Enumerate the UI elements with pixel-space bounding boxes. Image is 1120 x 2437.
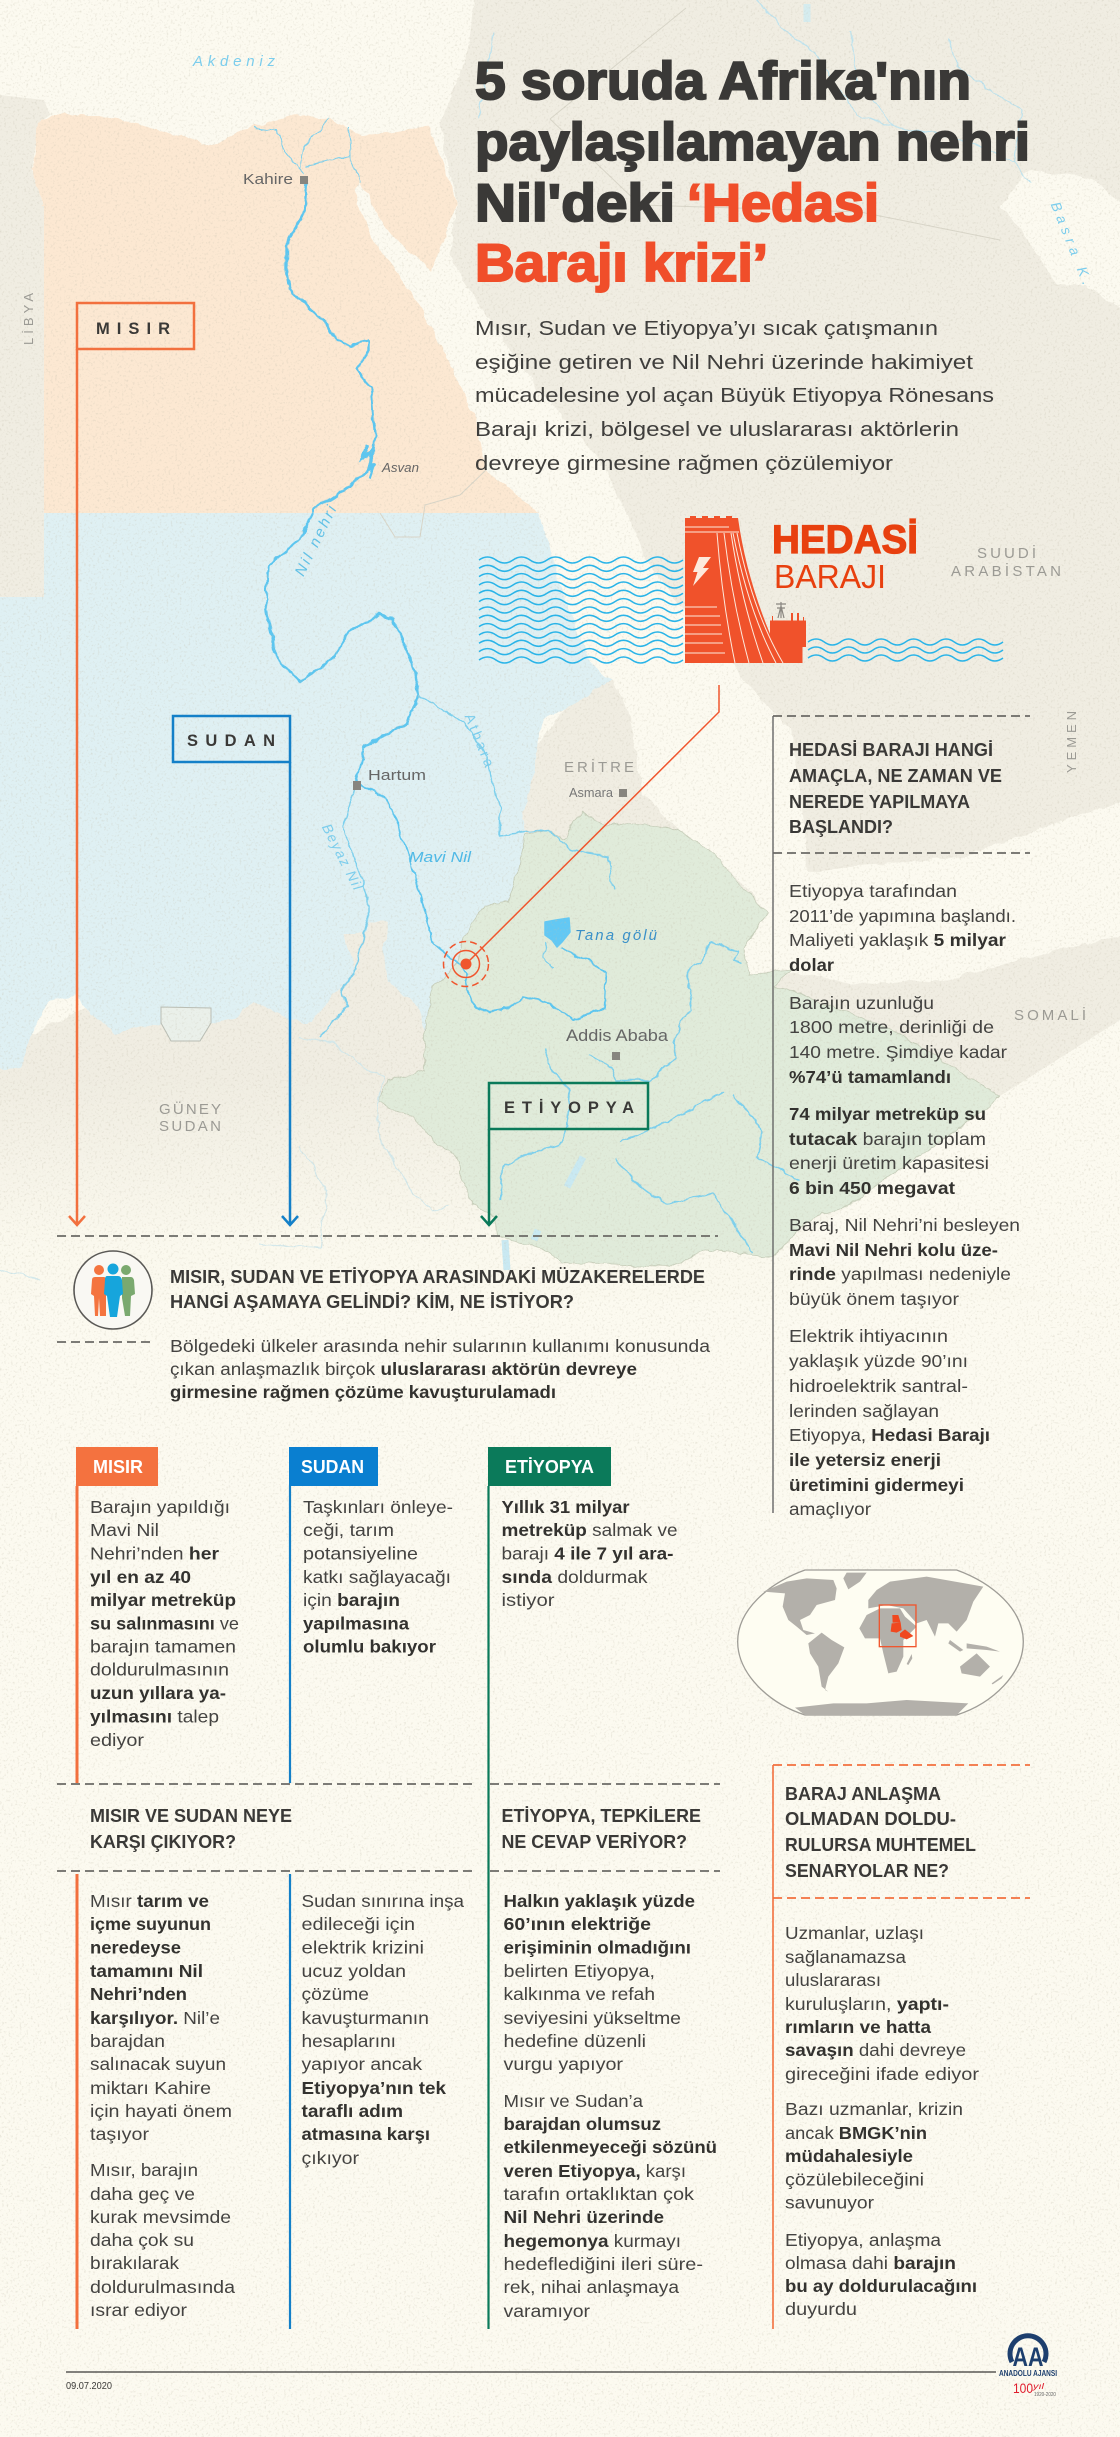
label: Guney Sudan: GÜNEY — [159, 1100, 221, 1118]
panel: Sudan position: potansiyeline — [303, 1544, 418, 1564]
text block: Etiyopya tarafından — [789, 881, 957, 901]
rivers: Middle East — [479, 0, 1029, 182]
intro text — [475, 317, 994, 475]
text block: savaşın dahi devreye — [785, 2040, 966, 2060]
text block: Misir objections: bırakılarak — [90, 2253, 179, 2273]
panel: Etiyopya position: istiyor — [502, 1590, 555, 1610]
text block: yaklaşık yüzde 90’ını — [789, 1351, 968, 1371]
power block — [770, 613, 806, 663]
icon: pylon — [776, 602, 786, 618]
logo: Anadolu Ajansi: 1920-2020 — [1034, 2392, 1056, 2398]
text block: Etiyopya response: veren Etiyopya, karşı — [504, 2161, 686, 2181]
panel: Misir position: yılmasını talep — [90, 1706, 219, 1726]
label: Mavi Nil: Mavi Nil — [409, 849, 472, 866]
text block: Sudan objections: çözüme — [302, 1984, 369, 2004]
label: Asvan: Asvan — [381, 460, 419, 475]
callout: Etiyopya — [481, 1083, 648, 1225]
text block: rımların ve hatta — [785, 2017, 931, 2037]
panel: Misir position: barajın tamamen — [90, 1636, 236, 1656]
heading: SENARYOLAR NE? — [785, 1861, 949, 1881]
heading: Misir ve Sudan: MISIR VE SUDAN NEYE — [90, 1806, 292, 1826]
panel: Misir position: Mavi Nil — [90, 1520, 159, 1540]
panel: Etiyopya position: ETİYOPYA — [505, 1457, 594, 1477]
text block: savunuyor — [785, 2192, 874, 2212]
label: Libya: LİBYA — [21, 293, 36, 345]
callout: Misir: MISIR — [96, 320, 170, 338]
text block: üretimini gidermeyi — [789, 1475, 964, 1495]
intro text: Mısır, Sudan ve Etiyopya’yı sıcak çatışmanın — [475, 317, 938, 340]
text block: Sudan objections: kavuşturmanın — [302, 2008, 429, 2028]
rivers — [0, 0, 1029, 1280]
border: Abyei pocket — [161, 1007, 211, 1041]
panel: Etiyopya position: barajı 4 ile 7 yıl ara- — [502, 1544, 674, 1564]
title: 5 soruda Afrika'nın — [475, 52, 971, 111]
panel: Sudan position: SUDAN — [301, 1457, 364, 1477]
text block: Maliyeti yaklaşık 5 milyar — [789, 930, 1006, 950]
waves left — [479, 557, 683, 663]
globe outline — [738, 1570, 1023, 1715]
country: Ethiopia — [378, 812, 1000, 1267]
date: 09.07.2020 — [66, 2380, 112, 2392]
text block: Misir objections: daha geç ve — [90, 2184, 195, 2204]
text block: Mavi Nil Nehri kolu üze- — [789, 1240, 998, 1260]
dam location pointer — [444, 685, 719, 986]
text block: 1800 metre, derinliği de — [789, 1017, 994, 1037]
panel: Sudan position: Taşkınları önleye- — [303, 1497, 453, 1517]
text block: Misir objections: tamamını Nil — [90, 1961, 203, 1981]
text block: Etiyopya response: rek, nihai anlaşmaya — [504, 2277, 679, 2297]
logo: Anadolu Ajansi — [999, 2336, 1057, 2398]
text block: Misir objections — [90, 1891, 235, 2320]
label: Asmara: Asmara — [569, 785, 614, 800]
text block: Etiyopya, Hedasi Barajı — [789, 1425, 990, 1445]
text block: Sudan objections: edileceği için — [302, 1914, 415, 1934]
panel: Misir position: ediyor — [90, 1730, 144, 1750]
title: Nil'deki — [475, 174, 675, 233]
panel: Etiyopya position: Yıllık 31 milyar — [502, 1497, 630, 1517]
panel: Etiyopya position: sında doldurmak — [502, 1567, 648, 1587]
label: Guney Sudan — [159, 1100, 221, 1135]
borders: faint — [380, 8, 1000, 537]
title: Barajı krizi’ — [475, 234, 768, 293]
text block: Etiyopya response: tarafın ortaklıktan çok — [504, 2184, 694, 2204]
title: ‘Hedasi — [687, 174, 879, 233]
rivers: Ethiopia tributaries — [500, 942, 800, 1253]
label: Eritre: ERİTRE — [564, 758, 634, 776]
label: Guney Sudan: SUDAN — [159, 1118, 221, 1135]
text block: Sudan objections: Sudan sınırına inşa — [302, 1891, 464, 1911]
text block: uluslararası — [785, 1970, 881, 1990]
continents — [763, 1573, 1003, 1715]
text block: enerji üretim kapasitesi — [789, 1153, 989, 1173]
heading — [170, 1267, 705, 1312]
text block: 74 milyar metreküp su — [789, 1104, 986, 1124]
callout: Misir — [69, 303, 194, 1225]
text block: Etiyopya response: Halkın yaklaşık yüzde — [504, 1891, 695, 1911]
heading: HEDASİ BARAJI HANGİ — [789, 740, 993, 760]
text block: Misir objections: barajdan — [90, 2031, 165, 2051]
land: Arabia and Middle East — [440, 0, 1120, 873]
waves right — [808, 639, 1003, 661]
text block — [785, 1923, 979, 2319]
text block: ancak BMGK’nin — [785, 2123, 927, 2143]
dam logo — [479, 516, 1003, 663]
text block: Misir objections: için hayati önem — [90, 2101, 232, 2121]
city markers — [300, 176, 627, 1060]
text block: Bazı uzmanlar, krizin — [785, 2099, 963, 2119]
panel: Misir position: doldurulmasının — [90, 1660, 229, 1680]
text block: lerinden sağlayan — [789, 1401, 939, 1421]
text block: Sudan objections: hesaplarını — [302, 2031, 396, 2051]
label: Nil nehri: Nil nehri — [292, 503, 341, 579]
heading: RULURSA MUHTEMEL — [785, 1835, 976, 1855]
text block: Bölgedeki ülkeler arasında nehir sularının kullanımı konusunda — [170, 1336, 710, 1356]
intro text: mücadelesine yol açan Büyük Etiyopya Rönesans — [475, 384, 994, 407]
text block: sağlanamazsa — [785, 1947, 906, 1967]
text block: Sudan objections: taraflı adım — [302, 2101, 403, 2121]
text block — [789, 881, 1020, 1519]
heading: HANGİ AŞAMAYA GELİNDİ? KİM, NE İSTİYOR? — [170, 1292, 574, 1312]
logo: Anadolu Ajansi: yıl — [1032, 2382, 1044, 2391]
rivers: South Sudan — [0, 1037, 450, 1280]
panel: Sudan position: için barajın — [303, 1590, 400, 1610]
callout: Sudan — [173, 716, 298, 1225]
river: Nile — [266, 182, 418, 782]
text block: Sudan objections: Etiyopya’nın tek — [302, 2078, 446, 2098]
text block: Sudan objections: elektrik krizini — [302, 1938, 424, 1958]
text block: büyük önem taşıyor — [789, 1289, 959, 1309]
logo: Anadolu Ajansi: ANADOLU AJANSI — [999, 2368, 1057, 2378]
panel: Sudan position: ceği, tarım — [303, 1520, 394, 1540]
text block: çıkan anlaşmazlık birçok uluslararası aktörün devreye — [170, 1359, 637, 1379]
label: Basra Korfezi: Basra K. — [1048, 199, 1096, 287]
panel: Misir position: milyar metreküp — [90, 1590, 236, 1610]
panel: Sudan position: yapılmasına — [303, 1614, 409, 1634]
text block: Etiyopya response: Mısır ve Sudan’a — [504, 2091, 643, 2111]
text block: kuruluşların, yaptı- — [785, 1994, 949, 2014]
intro text: eşiğine getiren ve Nil Nehri üzerinde hakimiyet — [475, 351, 973, 374]
text block: 2011’de yapımına başlandı. — [789, 906, 1016, 926]
text block: Misir objections: kurak mevsimde — [90, 2207, 231, 2227]
locator world map — [738, 1570, 1023, 1715]
text block: Etiyopya response: varamıyor — [504, 2301, 590, 2321]
heading: NEREDE YAPILMAYA — [789, 792, 970, 812]
text block: dolar — [789, 955, 834, 975]
text block: Etiyopya response: etkilenmeyeceği sözünü — [504, 2137, 717, 2157]
land: South Sudan, Eritrea, Somalia — [0, 667, 1120, 1300]
intro text: devreye girmesine rağmen çözülemiyor — [475, 452, 893, 475]
callout: Etiyopya: ETİYOPYA — [504, 1099, 634, 1117]
panel: Misir position: MISIR — [93, 1457, 143, 1477]
callout: Sudan: SUDAN — [187, 732, 275, 750]
text block: hidroelektrik santral- — [789, 1376, 968, 1396]
panel: Etiyopya position — [488, 1447, 678, 2329]
river: Nile delta — [254, 119, 361, 182]
text block: bu ay doldurulacağını — [785, 2276, 977, 2296]
panel: Misir position: Barajın yapıldığı — [90, 1497, 230, 1517]
text block: Misir objections: Mısır, barajın — [90, 2160, 198, 2180]
text block: Misir objections: daha çok su — [90, 2230, 194, 2250]
text block: Etiyopya response: barajdan olumsuz — [504, 2114, 661, 2134]
lake: Nasser — [363, 445, 375, 480]
river: White Nile — [320, 782, 368, 1037]
text block: Misir objections: doldurulmasında — [90, 2277, 235, 2297]
heading: Etiyopya tepkiler — [502, 1806, 701, 1852]
title: paylaşılamayan nehri — [475, 113, 1030, 172]
logo: Anadolu Ajansi: 100 — [1013, 2380, 1033, 2396]
panel: Misir position: Nehri’nden her — [90, 1544, 219, 1564]
intro text: Barajı krizi, bölgesel ve uluslararası aktörlerin — [475, 418, 959, 441]
panel: Etiyopya position: metreküp salmak ve — [502, 1520, 678, 1540]
river: Atbara — [418, 695, 614, 889]
panel: Sudan position — [289, 1447, 453, 2329]
text block: duyurdu — [785, 2299, 857, 2319]
section dividers — [57, 1784, 720, 1871]
text block: Etiyopya response: hedeflediğini ileri süre- — [504, 2254, 703, 2274]
panel: Misir position: uzun yıllara ya- — [90, 1683, 226, 1703]
text block: Misir objections: neredeyse — [90, 1938, 181, 1958]
text block: amaçlıyor — [789, 1499, 871, 1519]
country: Sudan — [0, 490, 611, 1071]
label: Kahire: Kahire — [243, 171, 293, 188]
heading: Etiyopya tepkiler: NE CEVAP VERİYOR? — [502, 1832, 687, 1852]
text block: tutacak barajın toplam — [789, 1129, 986, 1149]
text block: müdahalesiyle — [785, 2146, 913, 2166]
panel: scenarios — [773, 1765, 1030, 2329]
text block: Misir objections: salınacak suyun — [90, 2054, 226, 2074]
text block: Etiyopya response: vurgu yapıyor — [504, 2054, 623, 2074]
panel: Misir position: yıl en az 40 — [90, 1567, 191, 1587]
label: Atbara: Atbara — [462, 711, 498, 769]
land: Indian Ocean edge — [775, 1020, 1120, 1300]
heading: Misir ve Sudan — [90, 1806, 292, 1852]
lake: Tana — [545, 918, 570, 947]
heading — [789, 740, 1002, 837]
icon: lightning bolt — [693, 557, 711, 586]
panel: Sudan position: katkı sağlayacağı — [303, 1567, 451, 1587]
heading: MISIR, SUDAN VE ETİYOPYA ARASINDAKİ MÜZAKERELERDE — [170, 1267, 705, 1287]
text block: Etiyopya response: erişiminin olmadığını — [504, 1938, 691, 1958]
text block: Etiyopya response: 60’ının elektriğe — [504, 1914, 651, 1934]
footer rule — [66, 2371, 996, 2373]
title — [475, 52, 1030, 293]
map of the Nile region — [0, 0, 1120, 1300]
text block: gireceğini ifade ediyor — [785, 2064, 979, 2084]
text block: Etiyopya response: hegemonya kurmayı — [504, 2231, 681, 2251]
heading: Misir ve Sudan: KARŞI ÇIKIYOR? — [90, 1832, 236, 1852]
highlighted countries — [891, 1615, 913, 1639]
panel: Misir position — [76, 1447, 239, 2329]
text block: Etiyopya, anlaşma — [785, 2230, 941, 2250]
text block: Misir objections: taşıyor — [90, 2124, 149, 2144]
heading: Etiyopya tepkiler: ETİYOPYA, TEPKİLERE — [502, 1806, 701, 1826]
label: Somali: SOMALİ — [1014, 1006, 1086, 1024]
text block: çözülebileceğini — [785, 2170, 924, 2190]
selection box — [879, 1605, 916, 1647]
panel: negotiations — [57, 1236, 718, 1402]
heading: BAŞLANDI? — [789, 817, 893, 837]
text block: olmasa dahi barajın — [785, 2253, 956, 2273]
text block: Misir objections: ısrar ediyor — [90, 2300, 187, 2320]
text block: girmesine rağmen çözüme kavuşturulamadı — [170, 1382, 556, 1402]
text block: Sudan objections — [302, 1891, 464, 2168]
label: Tana golu: Tana gölü — [575, 927, 658, 944]
text block: Misir objections: içme suyunun — [90, 1914, 211, 1934]
text block: Elektrik ihtiyacının — [789, 1326, 948, 1346]
label: Beyaz Nil: Beyaz Nil — [319, 821, 366, 893]
panel: Misir position: su salınmasını ve — [90, 1614, 239, 1634]
text block: Sudan objections: ucuz yoldan — [302, 1961, 406, 1981]
lake: Middle East — [804, 4, 810, 22]
map labels — [21, 53, 1096, 1135]
text block: Etiyopya response: seviyesini yükseltme — [504, 2008, 681, 2028]
dam lines — [685, 527, 783, 663]
panel: Sudan position: olumlu bakıyor — [303, 1636, 436, 1656]
text block: Uzmanlar, uzlaşı — [785, 1923, 924, 1943]
text block: Barajın uzunluğu — [789, 993, 934, 1013]
text block: %74’ü tamamlandı — [789, 1067, 951, 1087]
label: Akdeniz: Akdeniz — [192, 53, 276, 70]
text block: Etiyopya response: hedefine düzenli — [504, 2031, 646, 2051]
text block: Baraj, Nil Nehri’ni besleyen — [789, 1215, 1020, 1235]
dam body — [685, 516, 783, 663]
text block: Sudan objections: çıkıyor — [302, 2148, 359, 2168]
text block: Misir objections: karşılıyor. Nil’e — [90, 2008, 220, 2028]
text block: Etiyopya response: kalkınma ve refah — [504, 1984, 655, 2004]
icon: people — [74, 1251, 152, 1329]
label: Suudi Arabistan: ARABİSTAN — [951, 562, 1061, 580]
heading: BARAJ ANLAŞMA — [785, 1784, 941, 1804]
label: Hartum: Hartum — [368, 767, 426, 784]
text block: Sudan objections: atmasına karşı — [302, 2124, 430, 2144]
heading: OLMADAN DOLDU- — [785, 1809, 956, 1829]
text block: 6 bin 450 megavat — [789, 1178, 955, 1198]
label: Yemen: YEMEN — [1064, 711, 1079, 773]
logo: Anadolu Ajansi: AA — [1012, 2342, 1044, 2372]
text block: rinde yapılması nedeniyle — [789, 1264, 1011, 1284]
river: Blue Nile — [357, 782, 607, 1020]
text block: Misir objections: miktarı Kahire — [90, 2078, 211, 2098]
country: Egypt — [30, 115, 565, 535]
text block: Misir objections: Mısır tarım ve — [90, 1891, 209, 1911]
label: Suudi Arabistan — [951, 544, 1061, 580]
text block: Etiyopya response — [504, 1891, 717, 2321]
land: Libya strip — [0, 95, 50, 597]
text block: Misir objections: Nehri’nden — [90, 1984, 187, 2004]
label: Addis Ababa: Addis Ababa — [566, 1026, 669, 1045]
text block — [170, 1336, 710, 1402]
lakes: Ethiopian rift — [505, 1157, 583, 1270]
text block: Etiyopya response: Nil Nehri üzerinde — [504, 2207, 664, 2227]
heading: AMAÇLA, NE ZAMAN VE — [789, 766, 1002, 786]
label: Suudi Arabistan: SUUDİ — [977, 544, 1036, 562]
text block: Sudan objections: yapıyor ancak — [302, 2054, 422, 2074]
dam logo: BARAJI — [774, 558, 886, 595]
heading — [785, 1784, 976, 1881]
text block: 140 metre. Şimdiye kadar — [789, 1042, 1007, 1062]
text block: Etiyopya response: belirten Etiyopya, — [504, 1961, 655, 1981]
panel: purpose of the dam — [773, 716, 1030, 1519]
text block: ile yetersiz enerji — [789, 1450, 941, 1470]
logo text: HEDASİ — [772, 518, 918, 562]
